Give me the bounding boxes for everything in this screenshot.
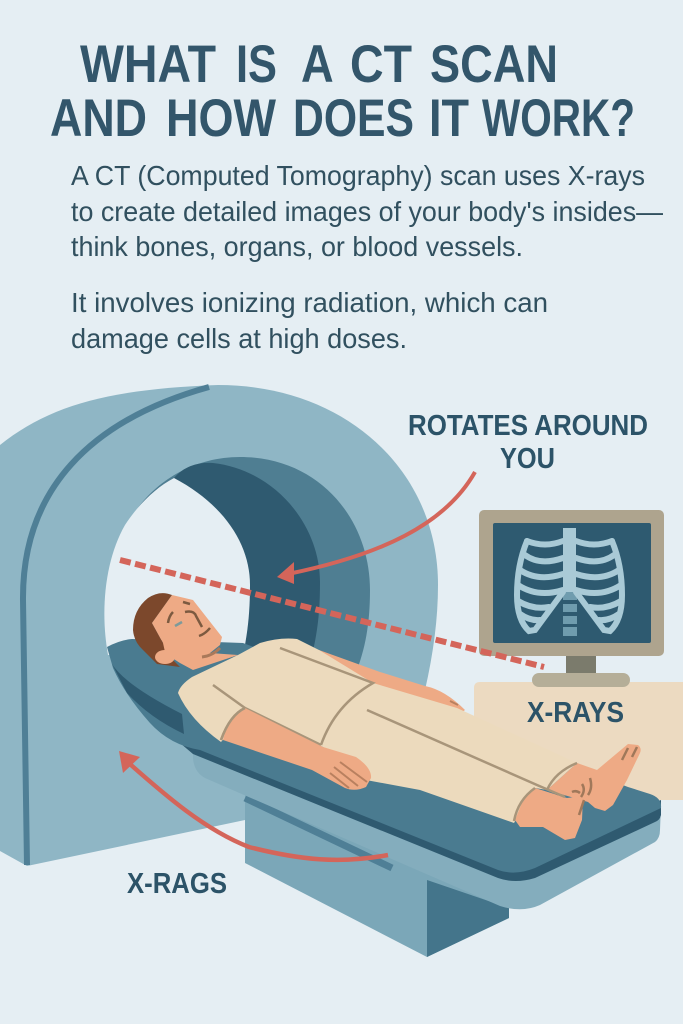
text block: description <box>71 160 663 262</box>
title: IT <box>429 89 469 148</box>
patient table <box>107 639 661 909</box>
back foot <box>547 744 641 811</box>
icon: monitor <box>479 510 664 687</box>
gantry front edge <box>23 387 209 865</box>
table edge <box>180 743 661 881</box>
arrow: rotates around <box>277 472 475 584</box>
text block: description: A CT (Computed Tomography) scan uses X-rays <box>71 160 645 191</box>
head and neck <box>152 595 238 670</box>
text block: radiation note: damage cells at high doses. <box>71 323 407 354</box>
pedestal <box>245 790 509 957</box>
title: A <box>301 35 333 94</box>
pillow side <box>112 664 184 734</box>
ear <box>155 650 175 664</box>
near arm <box>223 708 371 790</box>
gown seams <box>213 648 577 821</box>
bore opening <box>105 457 370 720</box>
far arm <box>316 650 465 725</box>
x-ray rib cage <box>517 528 622 636</box>
text block: description: to create detailed images of your body's insides— <box>71 196 663 227</box>
desk <box>474 682 683 800</box>
label: x-rays: X-RAYS <box>527 697 624 729</box>
title: CT <box>350 35 412 94</box>
title: WHAT <box>80 35 216 94</box>
face features <box>168 602 210 636</box>
text block: description: think bones, organs, or blood vessels. <box>71 231 523 262</box>
front foot <box>515 788 583 840</box>
title: SCAN <box>430 35 558 94</box>
label: rotates around you: YOU <box>500 443 555 475</box>
CT gantry <box>0 385 438 866</box>
text block: radiation note: It involves ionizing radiation, which can <box>71 287 548 318</box>
hair <box>133 593 180 667</box>
table rim <box>193 745 661 909</box>
dashed line: x-ray beam <box>120 560 544 667</box>
title: IS <box>236 35 277 94</box>
title <box>50 35 635 148</box>
title: WORK? <box>482 89 635 148</box>
table surface <box>107 639 661 873</box>
gown <box>178 638 577 823</box>
label: x-rags: X-RAGS <box>127 868 227 900</box>
arrow: lower curved rotation <box>119 751 388 860</box>
title: DOES <box>293 89 414 148</box>
label: rotates around you <box>408 410 648 475</box>
text block: radiation note <box>71 287 548 354</box>
patient <box>133 593 641 840</box>
title: AND <box>50 89 147 148</box>
label: rotates around you: ROTATES AROUND <box>408 410 648 442</box>
title: HOW <box>166 89 276 148</box>
